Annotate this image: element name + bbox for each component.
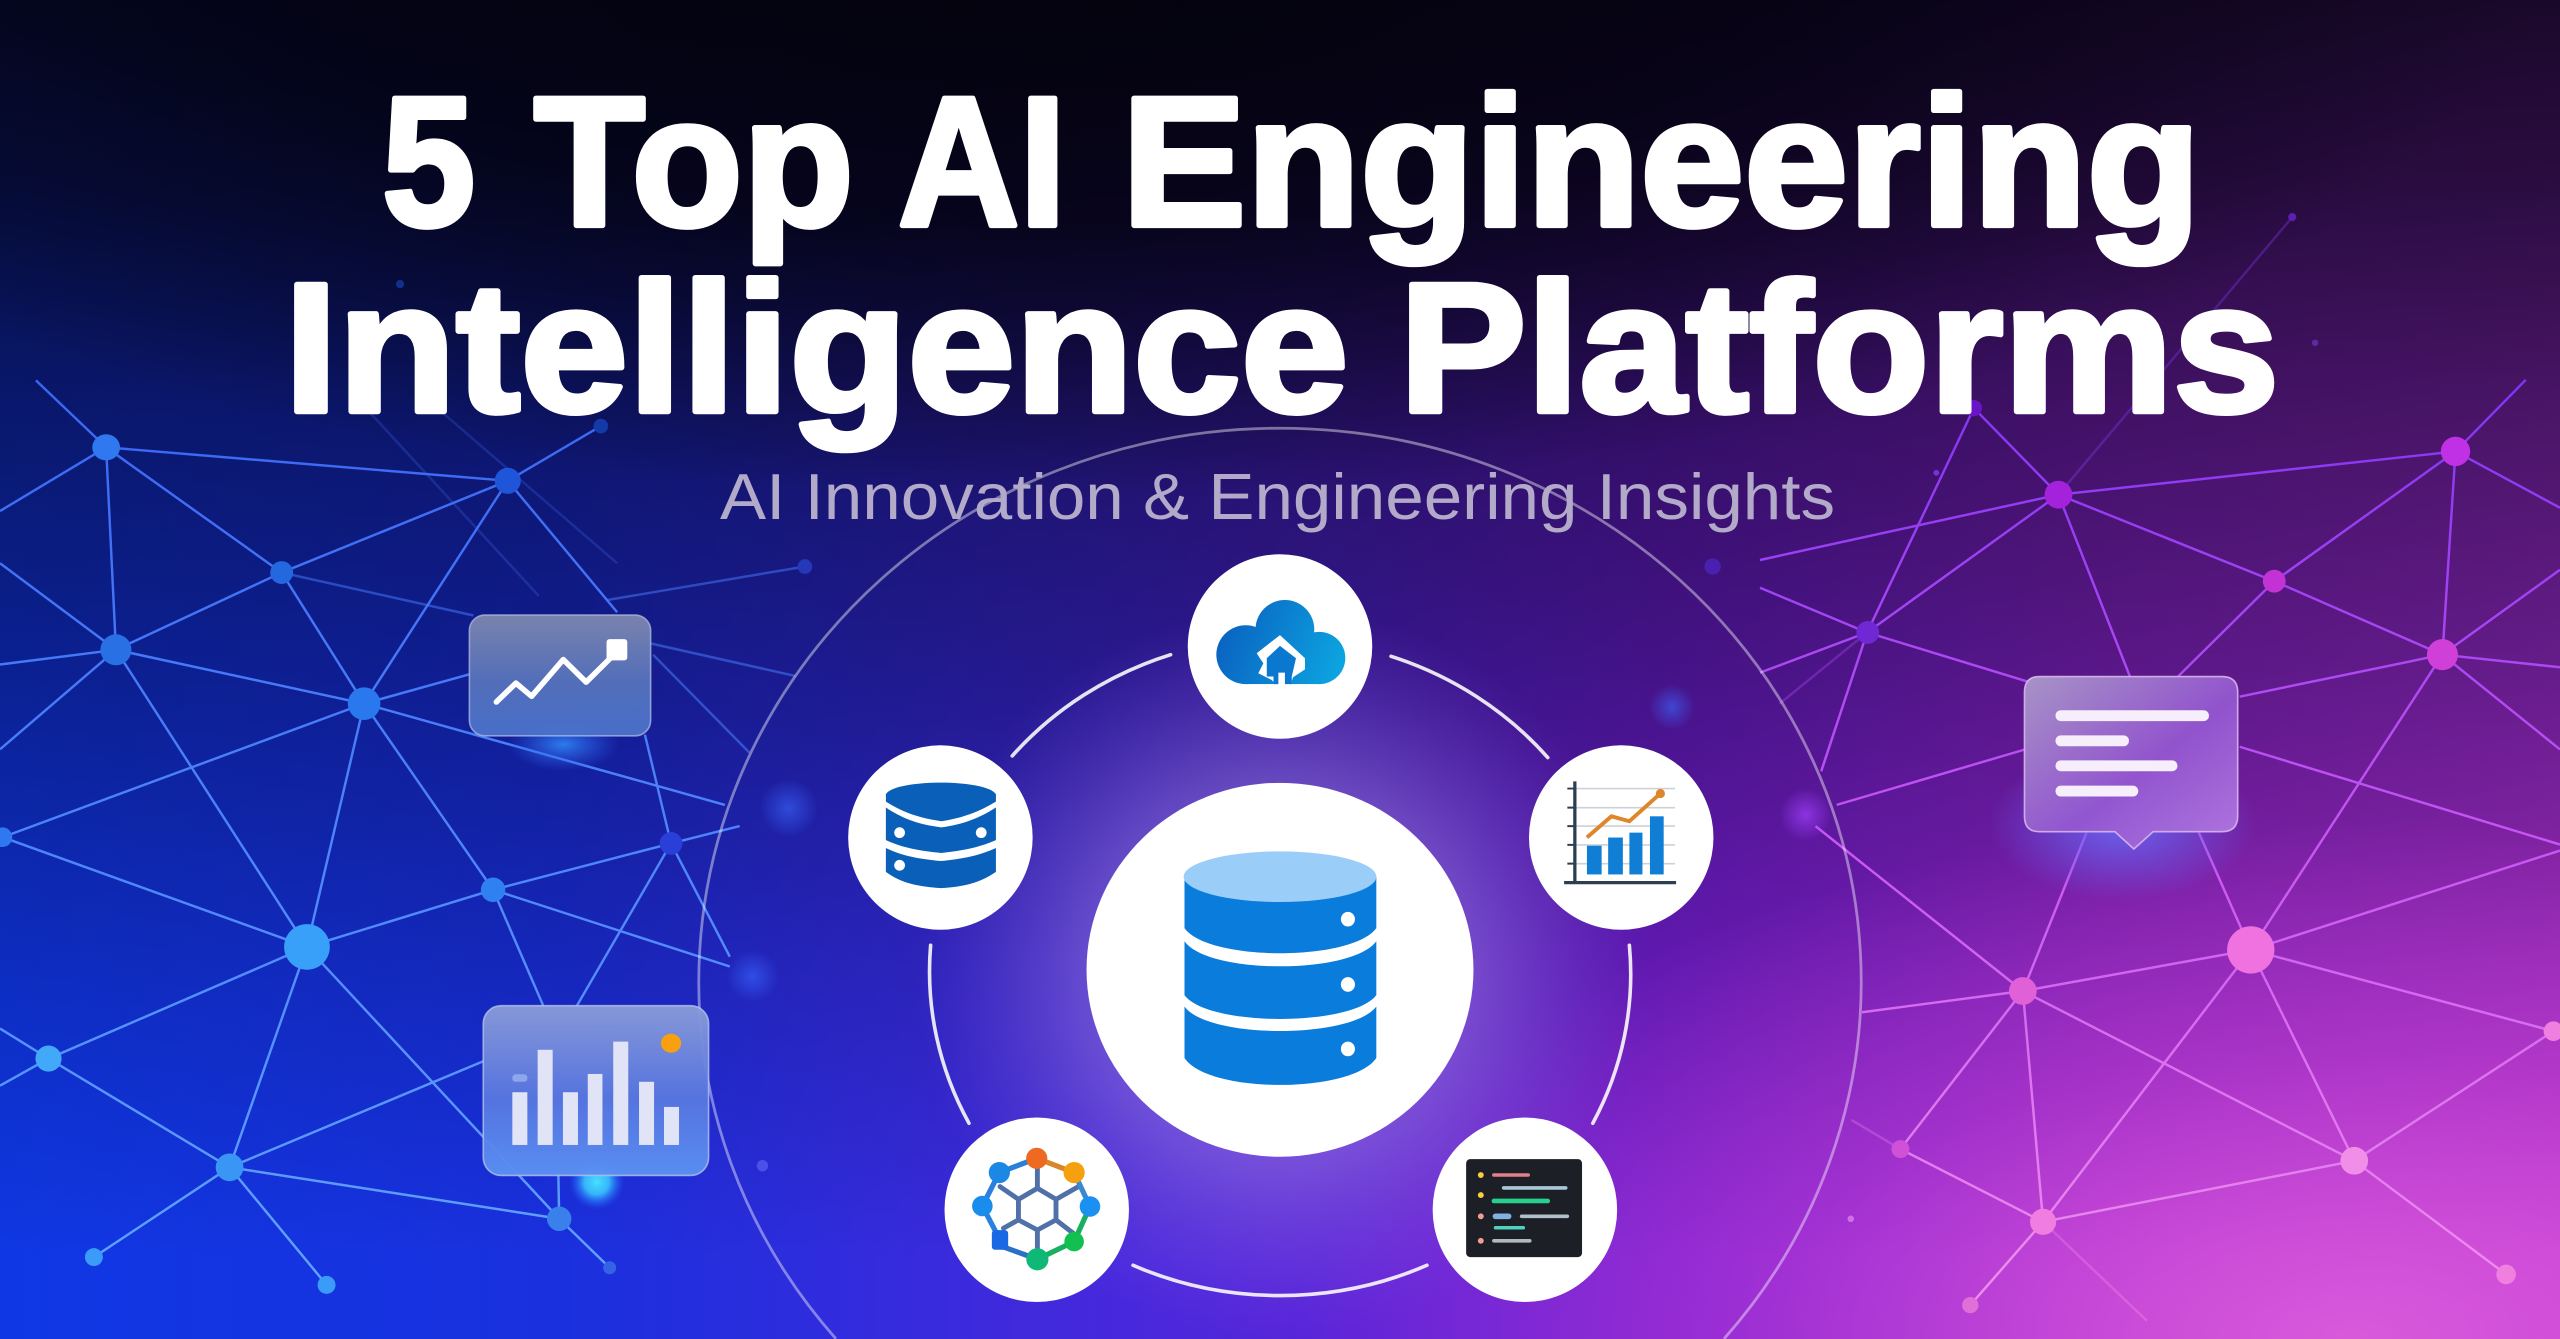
card: speech bubble — [2024, 677, 2238, 849]
glow behind central hub — [914, 607, 1646, 1339]
central hub: database — [1087, 783, 1473, 1157]
network: left blue mesh — [0, 380, 805, 1285]
glow around speech bubble — [1989, 749, 2256, 900]
card: bar chart — [483, 1006, 709, 1175]
title: Top — [534, 59, 854, 265]
icon: database small — [848, 745, 1033, 930]
icon: growth chart — [1529, 745, 1713, 930]
card: trend line — [469, 615, 651, 736]
subtitle: AI Innovation & Engineering Insights — [720, 460, 1835, 533]
title: Intelligence — [284, 245, 1349, 451]
glow under bar chart card — [569, 1154, 624, 1210]
network: right purple mesh — [1760, 217, 2560, 1321]
inner ring arcs — [930, 655, 1631, 1296]
icon: cloud — [1188, 554, 1372, 739]
title: Engineering — [1122, 59, 2201, 265]
network nodes: left — [0, 280, 818, 1294]
icon: code panel — [1433, 1118, 1617, 1302]
title — [284, 59, 2279, 451]
title: Platforms — [1399, 245, 2279, 451]
network nodes: right — [1649, 213, 2560, 1313]
title: AI — [898, 59, 1066, 265]
icon: neural network — [944, 1118, 1129, 1302]
outer orbit ring — [699, 428, 1861, 1339]
glow under trend card — [508, 718, 619, 771]
title: 5 — [382, 59, 475, 265]
